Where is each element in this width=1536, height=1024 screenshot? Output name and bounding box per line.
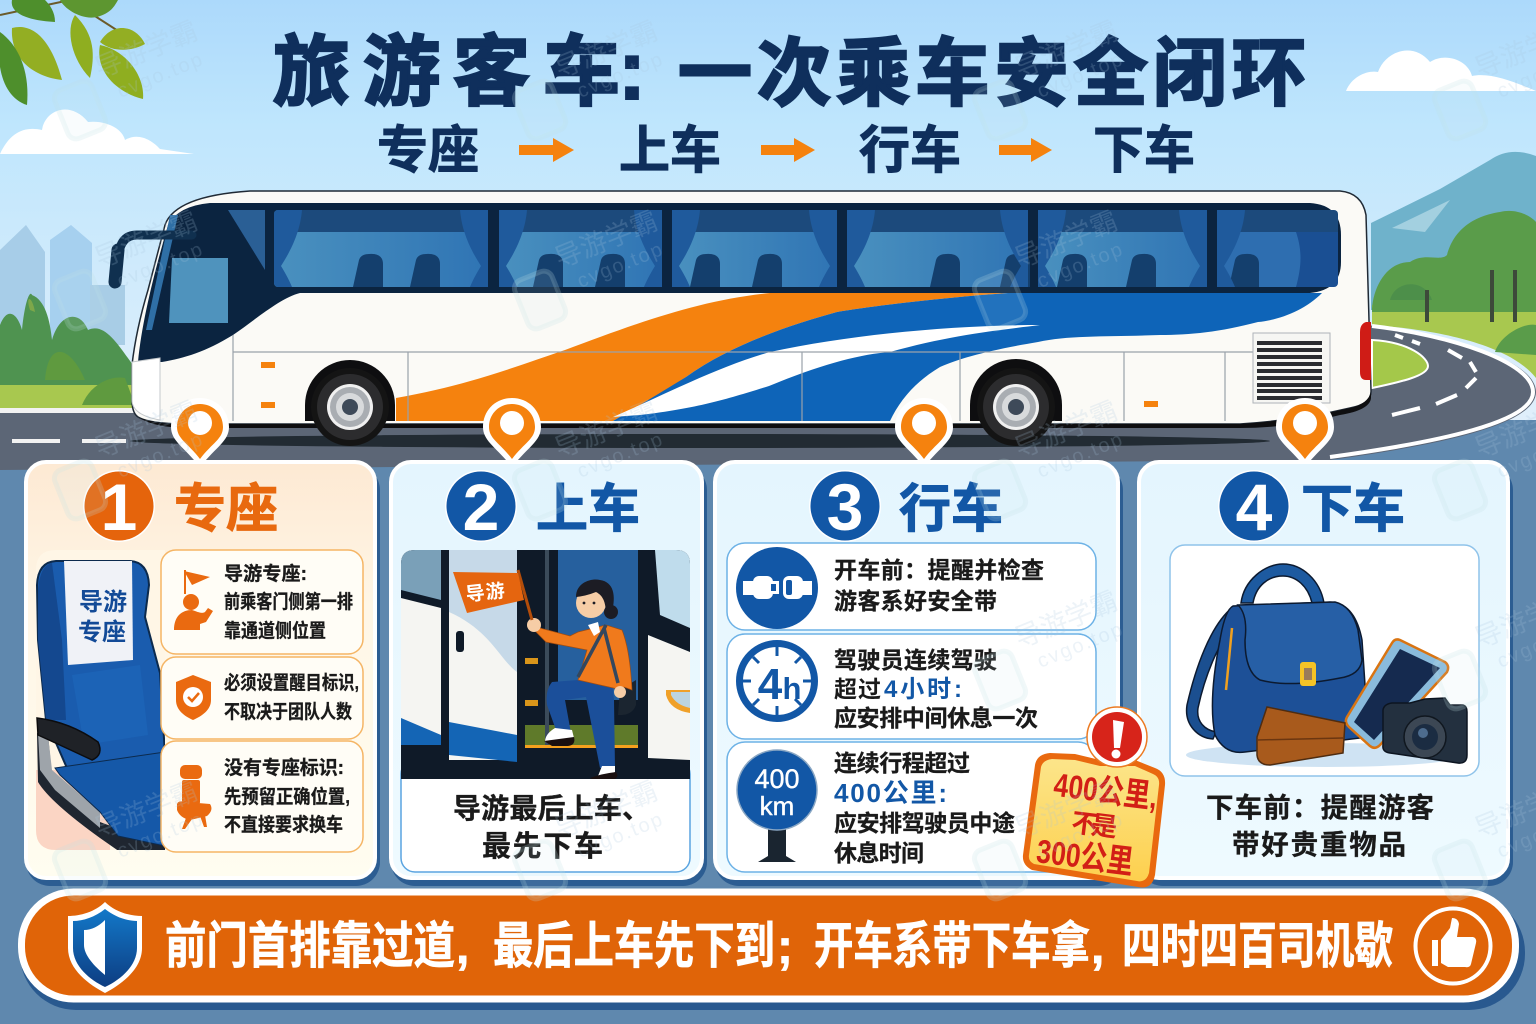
title: 一次乘车安全闭环 <box>678 32 1306 115</box>
row: 导游专座: 靠通道侧位置 <box>224 619 326 642</box>
warning tag: 400公里, <box>1052 766 1160 815</box>
number 3: 3 <box>827 470 863 544</box>
icon: shield <box>68 902 142 993</box>
caption box <box>401 760 690 872</box>
orange swoosh <box>396 293 1008 421</box>
title: 旅游客车 <box>273 30 620 116</box>
background sky <box>0 0 1536 420</box>
watermarks: cvgo.top <box>114 808 207 863</box>
window band <box>138 203 1341 362</box>
seat image <box>36 550 166 852</box>
city buildings <box>0 225 125 345</box>
warning tag: 不是 <box>1070 807 1119 843</box>
title: : <box>618 23 646 117</box>
row: 4小时 <box>727 634 1096 739</box>
front wheel <box>311 368 389 446</box>
caption 上车: 导游最后上车、 <box>453 793 650 824</box>
row: 4小时: 应安排中间休息一次 <box>834 705 1038 731</box>
location pins <box>171 398 1334 467</box>
road edge and curve markings <box>0 326 1533 457</box>
tail light <box>1360 322 1371 380</box>
row: 导游专座 <box>161 550 363 654</box>
seat label <box>64 561 133 665</box>
mirror <box>115 235 192 282</box>
windows <box>274 210 1338 287</box>
watermarks: 导游学霸 <box>551 776 662 844</box>
watermarks: 导游学霸 <box>1011 206 1122 274</box>
number 1: 1 <box>101 470 137 544</box>
arrow 3 <box>999 138 1052 162</box>
slogan: 最后上车先下到 <box>493 918 775 974</box>
heading 下车: 下车 <box>1301 481 1405 539</box>
arrow 2 <box>761 138 815 162</box>
icon: thumbs up <box>1416 908 1490 984</box>
clasp <box>1300 662 1316 686</box>
heading 上车: 上车 <box>536 481 640 539</box>
icon: seat belt <box>736 547 818 629</box>
image box <box>1170 545 1479 776</box>
icon: guide with flag <box>174 570 213 630</box>
watermarks: cvgo.top <box>1034 238 1127 293</box>
leaves top-left <box>0 0 145 105</box>
row: 导游专座: 导游专座: <box>224 562 307 585</box>
row: 必须设置: 不取决于团队人数 <box>224 701 352 723</box>
watermarks: cvgo.top <box>1034 618 1127 673</box>
bus body <box>132 191 1371 424</box>
icon: 400 km sign: km <box>760 791 794 821</box>
row: 必须设置: 必须设置醒目标识, <box>224 672 359 694</box>
bus <box>115 191 1371 446</box>
slogan: 四时四百司机歇 <box>1122 918 1393 974</box>
row: 必须设置 <box>161 657 363 739</box>
row: 安全带: 开车前：提醒并检查 <box>834 557 1044 583</box>
number 2 <box>445 470 517 544</box>
cloud left <box>0 110 194 154</box>
bus underbody <box>140 392 1371 428</box>
watermarks: cvgo.top <box>114 48 207 103</box>
slogan: 前门首排靠过道 <box>165 918 455 974</box>
front quarter glass <box>228 210 265 270</box>
step flow: 上车 <box>619 122 721 179</box>
pin 1 <box>171 398 229 467</box>
row: 400公里 <box>727 742 1096 872</box>
mountain highlight <box>1392 200 1450 232</box>
wallet <box>1257 707 1345 765</box>
row: 没有专座标识: 先预留正确位置, <box>224 785 350 808</box>
slogan: ; <box>777 921 793 974</box>
reflectors <box>261 362 1158 408</box>
white streak <box>613 325 1040 417</box>
blue swoosh <box>613 293 1322 421</box>
grass right <box>1372 305 1536 378</box>
pin 4 <box>1276 398 1334 467</box>
trees right <box>1372 211 1536 355</box>
caption 上车 <box>453 793 650 863</box>
watermarks: 导游学霸 <box>1011 586 1122 654</box>
heading 专座: 专座 <box>174 481 278 539</box>
arrow 1 <box>519 138 574 162</box>
heading 行车: 行车 <box>899 481 1003 539</box>
icon: 4h clock <box>740 644 814 718</box>
step flow: 专座 <box>377 122 479 179</box>
watermarks: 导游学霸 <box>551 206 662 274</box>
icon: exclamation <box>1087 707 1147 767</box>
icon: shield <box>176 675 211 720</box>
summary banner <box>20 892 1525 1010</box>
row: 没有专座标识: 不直接要求换车 <box>224 813 343 836</box>
watermarks: cvgo.top <box>574 238 667 293</box>
watermarks: 导游学霸 <box>551 396 662 464</box>
slogan: 开车系带下车拿 <box>814 918 1090 974</box>
number 3 <box>809 470 881 544</box>
bus panel lines <box>233 335 1253 421</box>
row: 400公里: 休息时间 <box>834 840 924 866</box>
engine grille <box>1253 333 1330 403</box>
number 2: 2 <box>463 470 499 544</box>
row: 安全带 <box>727 543 1096 630</box>
pin 2 <box>483 398 541 467</box>
watermarks: cvgo.top <box>1034 808 1127 863</box>
side door window <box>169 258 228 323</box>
bag <box>1187 564 1366 752</box>
number 1 <box>83 470 155 544</box>
row: 4小时: 驾驶员连续驾驶 <box>834 647 997 673</box>
row: 导游专座: 前乘客门侧第一排 <box>224 590 353 613</box>
watermarks: 导游学霸 <box>551 16 662 84</box>
row: 400公里: 连续行程超过 <box>834 750 970 776</box>
icon: 4h clock: 4 <box>758 660 783 709</box>
watermarks: cvgo.top <box>1034 48 1127 103</box>
number 4: 4 <box>1236 470 1273 544</box>
rear wheel <box>977 368 1055 446</box>
panel: 专座 <box>26 462 380 886</box>
watermarks: cvgo.top <box>1034 428 1127 483</box>
icon: 4h clock: h <box>783 671 801 706</box>
mountain <box>1371 152 1536 310</box>
step flow: 下车 <box>1093 122 1195 179</box>
guide flag <box>453 570 532 620</box>
trees left <box>0 294 135 410</box>
slogan <box>165 918 1393 974</box>
slogan: , <box>456 921 469 974</box>
watermarks: cvgo.top <box>574 48 667 103</box>
guide flag: 导游 <box>465 579 506 606</box>
row: 安全带: 游客系好安全带 <box>834 588 997 614</box>
caption 下车: 带好贵重物品 <box>1232 829 1406 860</box>
number 4 <box>1218 470 1290 544</box>
step flow: 行车 <box>859 122 961 179</box>
seat label: 导游 <box>79 589 127 616</box>
row: 400公里: 400公里: <box>834 778 947 808</box>
watermarks: 导游学霸 <box>91 16 202 84</box>
slogan: , <box>1091 921 1104 974</box>
bus shadow <box>130 434 1270 448</box>
watermarks: 导游学霸 <box>91 396 202 464</box>
seat label: 专座 <box>78 618 126 646</box>
caption 上车: 最先下车 <box>482 830 603 863</box>
panel: 上车 <box>391 462 707 886</box>
icon: bag and valuables <box>1186 564 1467 767</box>
panel: 行车 <box>715 462 1123 886</box>
camera <box>1383 698 1467 763</box>
warning tag: 300公里 <box>1035 832 1135 881</box>
watermarks: 导游学霸 <box>1011 776 1122 844</box>
icon: 400 km sign <box>737 750 817 862</box>
caption 下车: 下车前：提醒游客 <box>1206 792 1434 823</box>
watermarks: cvgo.top <box>574 808 667 863</box>
watermarks: cvgo.top <box>114 428 207 483</box>
watermarks: 导游学霸 <box>1011 16 1122 84</box>
cloud right <box>1346 51 1536 91</box>
guide figure <box>527 580 636 780</box>
row: 400公里: 应安排驾驶员中途 <box>834 810 1015 836</box>
row: 4小时: 4小时: <box>884 676 962 703</box>
watermarks: 导游学霸 <box>1011 396 1122 464</box>
lower background <box>0 455 1536 1024</box>
pin 3 <box>895 398 953 467</box>
windshield highlight <box>146 215 178 330</box>
warning tag <box>1023 707 1165 888</box>
caption 下车 <box>1206 792 1434 860</box>
watermarks: 导游学霸 <box>91 776 202 844</box>
icon: 400 km sign: 400 <box>754 764 800 794</box>
title <box>273 23 1306 117</box>
watermarks: cvgo.top <box>574 428 667 483</box>
watermarks: 导游学霸 <box>91 206 202 274</box>
row: 4小时: 超过 <box>834 676 881 702</box>
road <box>0 325 1536 470</box>
panel: 下车 <box>1139 462 1513 886</box>
watermarks: cvgo.top <box>114 238 207 293</box>
row: 没有专座标识 <box>161 741 363 852</box>
icon: seat <box>177 765 211 829</box>
row: 没有专座标识: 没有专座标识: <box>224 756 344 779</box>
boarding scene <box>401 550 690 780</box>
step flow <box>377 122 1195 179</box>
wheel arches <box>305 359 1062 421</box>
front lamp <box>132 358 160 420</box>
phone <box>1346 639 1448 748</box>
